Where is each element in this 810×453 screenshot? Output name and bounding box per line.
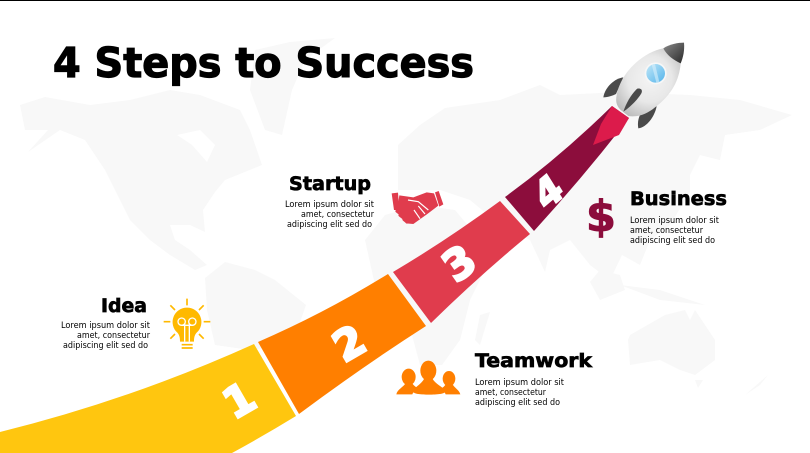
Idea description: Lorem ipsum dolor sit (61, 321, 150, 331)
ribbon segment 1 (0, 344, 296, 453)
icon: handshake (392, 191, 443, 224)
Idea description: amet, consectetur (77, 331, 150, 341)
Idea label: Idea (101, 295, 147, 317)
icon: rocket (603, 43, 684, 128)
ribbon segment 3 (393, 201, 530, 323)
Idea description: adipiscing elit sed do (63, 341, 148, 351)
Teamwork description: amet, consectetur (475, 388, 546, 398)
number 3: 3 (433, 235, 485, 292)
number 4: 4 (527, 166, 571, 220)
Business label (630, 188, 727, 246)
icon: dollar sign: $ (586, 192, 616, 242)
icon: light bulb (164, 299, 210, 348)
number 1: 1 (214, 372, 264, 429)
Startup description: Lorem ipsum dolor sit (285, 200, 374, 210)
Startup label (285, 173, 374, 230)
Idea description (61, 321, 150, 351)
Teamwork description: adipiscing elit sed do (475, 398, 560, 408)
Business description: Lorem ipsum dolor sit (630, 216, 719, 226)
Teamwork description (475, 378, 564, 408)
Idea label (61, 295, 150, 351)
number 2: 2 (324, 315, 374, 372)
Startup description: adipiscing elit sed do (287, 220, 372, 230)
Startup description (285, 200, 374, 230)
Business description (630, 216, 719, 246)
Teamwork label: Teamwork (475, 350, 592, 372)
ribbon segment 4 with flame (505, 106, 629, 231)
map lakes (177, 130, 215, 162)
Business description: adipiscing elit sed do (630, 236, 715, 246)
icon: team (396, 361, 460, 395)
Business label: Business (630, 188, 727, 210)
Business description: amet, consectetur (630, 226, 703, 236)
Teamwork label (475, 350, 592, 408)
Startup label: Startup (289, 173, 371, 195)
world map background (20, 38, 792, 395)
ribbon segment 2 (258, 274, 426, 414)
Startup description: amet, consectetur (301, 210, 374, 220)
title: 4 Steps to Success (53, 39, 474, 87)
Teamwork description: Lorem ipsum dolor sit (475, 378, 564, 388)
flame (593, 106, 629, 145)
